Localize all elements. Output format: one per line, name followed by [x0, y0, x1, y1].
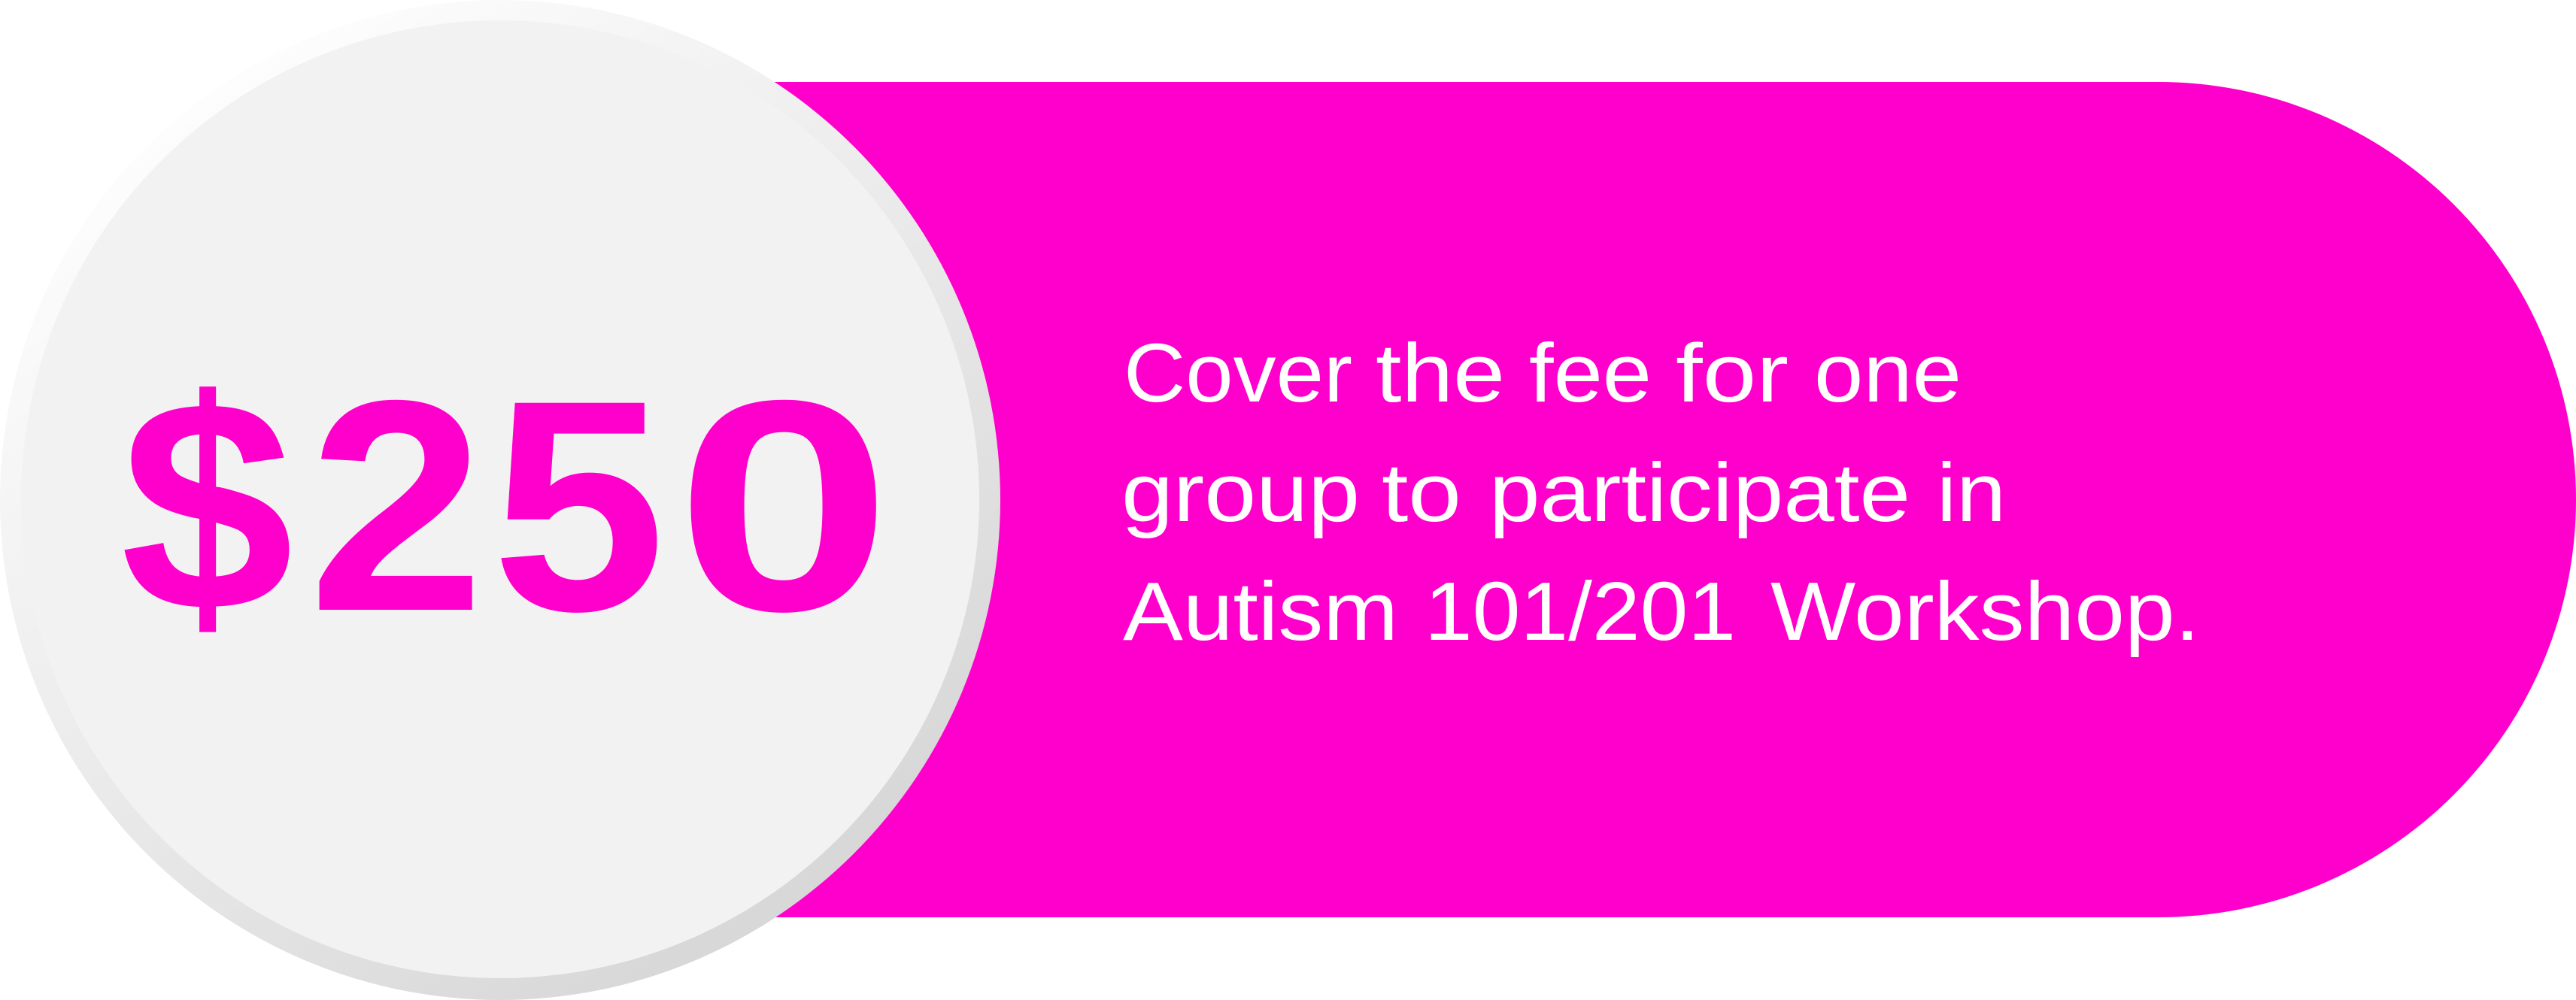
- price amount $250: 2: [308, 338, 484, 674]
- price amount $250: 0: [675, 338, 892, 674]
- text line 1: Cover: [1124, 327, 1352, 420]
- text line 2: participate: [1489, 447, 1910, 539]
- panel: magenta pill: [301, 82, 2576, 917]
- text line 1: fee: [1529, 327, 1652, 420]
- text line 2: group: [1121, 447, 1360, 539]
- badge: price circle: [0, 0, 1000, 1000]
- badge inner disc: [21, 20, 979, 978]
- text line 2: to: [1382, 447, 1461, 539]
- text line 1: for: [1676, 327, 1789, 420]
- description text: [1121, 327, 2200, 658]
- text line 1: one: [1814, 327, 1962, 420]
- text line 3: [1123, 565, 2200, 658]
- price amount $250: [120, 338, 892, 674]
- text line 1: [1124, 327, 1962, 420]
- text line 3: 101/201: [1425, 565, 1736, 658]
- price amount $250: 5: [492, 338, 666, 674]
- badge outer gradient ring: [0, 0, 1000, 1000]
- text line 2: [1121, 447, 2006, 539]
- text line 3: Autism: [1123, 565, 1398, 658]
- price amount $250: $: [120, 338, 293, 674]
- text line 3: Workshop.: [1770, 565, 2200, 658]
- text line 2: in: [1937, 447, 2006, 539]
- text line 1: the: [1376, 327, 1505, 420]
